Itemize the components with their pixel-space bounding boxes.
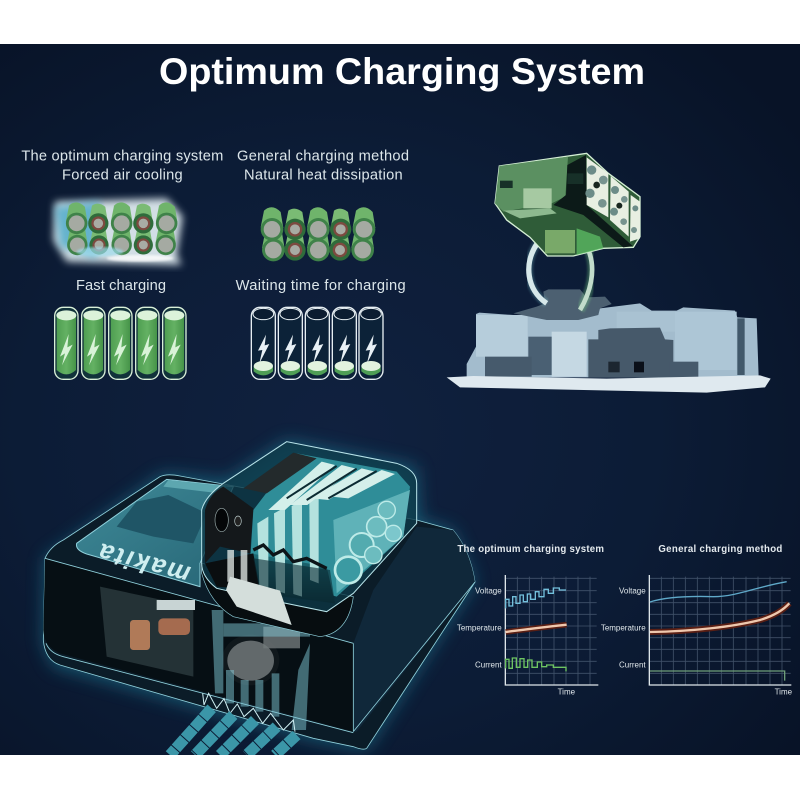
green battery module xyxy=(495,153,640,256)
makita logo: makita xyxy=(95,537,193,591)
panel: charts xyxy=(457,544,793,697)
axis labels xyxy=(457,587,576,697)
bottom white band xyxy=(0,755,800,800)
icon: full batteries xyxy=(55,307,186,379)
label: waiting time: Waiting time for charging xyxy=(236,278,406,294)
axis labels: Current xyxy=(619,661,646,670)
airflow arrows xyxy=(170,708,297,755)
heading: general method: General charging method xyxy=(237,148,409,164)
exit vents xyxy=(203,693,295,732)
air channels xyxy=(212,610,310,730)
label: fast charging: Fast charging xyxy=(76,278,166,294)
panel: charging comparison xyxy=(21,148,409,379)
subheading: forced air cooling: Forced air cooling xyxy=(62,168,183,184)
axis labels: Current xyxy=(475,661,502,670)
battery pack xyxy=(202,442,417,637)
title: Optimum Charging System xyxy=(159,51,645,92)
illustration: battery pack over circuit board xyxy=(447,153,771,393)
battery release latch xyxy=(226,577,292,625)
axis labels: Voltage xyxy=(619,587,646,596)
connecting ribbons xyxy=(529,243,592,310)
icon: nearly empty batteries xyxy=(251,307,383,379)
cooling fan xyxy=(222,627,300,685)
line chart: general method xyxy=(601,575,793,697)
charger top panel xyxy=(76,479,233,591)
axis labels: Temperature xyxy=(601,624,646,633)
axis labels: Time xyxy=(775,688,793,697)
internal coils xyxy=(100,587,195,677)
circuit board xyxy=(447,289,771,393)
illustration: charger with transparent battery xyxy=(43,440,475,755)
heading: optimum system: The optimum charging system xyxy=(21,148,223,164)
icon: air cooled cells xyxy=(53,198,183,265)
axis labels: Time xyxy=(558,688,576,697)
glow xyxy=(43,440,475,750)
axis labels: Temperature xyxy=(457,624,502,633)
icon: naturally cooled cells xyxy=(261,207,375,261)
subheading: natural heat dissipation: Natural heat dissipation xyxy=(244,168,403,184)
axis labels xyxy=(601,587,793,697)
line chart: optimum system xyxy=(457,575,598,697)
chart title: optimum system: The optimum charging system xyxy=(457,544,604,555)
charger base xyxy=(43,475,475,749)
chart title: general method: General charging method xyxy=(658,544,782,555)
axis labels: Voltage xyxy=(475,587,502,596)
